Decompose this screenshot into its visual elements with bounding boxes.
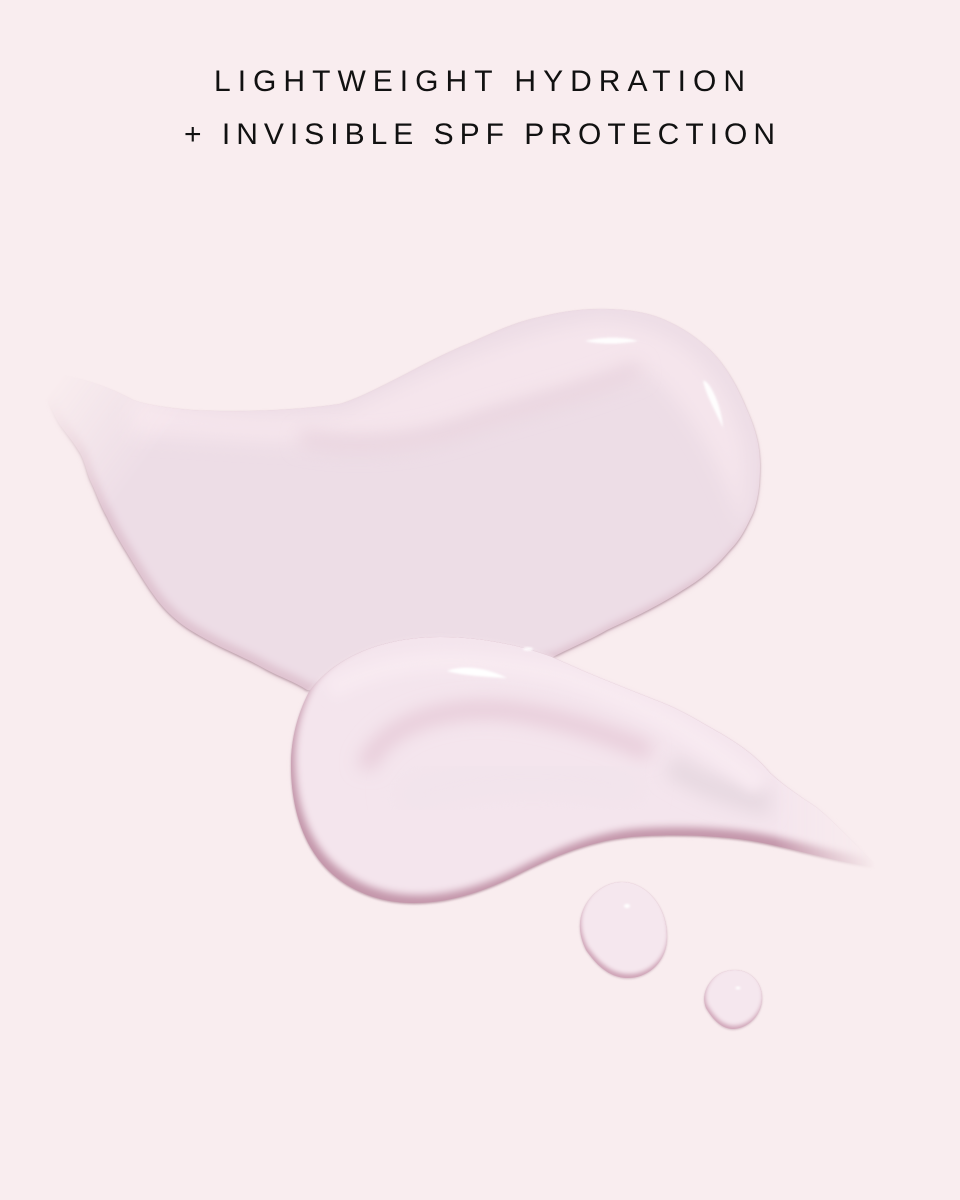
highlight: right gloss: [703, 381, 723, 428]
highlight: lower gloss: [447, 668, 507, 678]
infographic canvas: [54, 70, 866, 1031]
upper cream swatch: [40, 303, 764, 703]
highlight: small gloss at junction: [523, 647, 533, 651]
highlight: upper gloss: [585, 338, 638, 344]
title: + INVISIBLE SPF PROTECTION: [184, 118, 775, 151]
large droplet: [580, 878, 668, 979]
title: [184, 65, 775, 151]
lower cream swatch: [291, 629, 884, 904]
title: LIGHTWEIGHT HYDRATION: [214, 65, 745, 98]
small droplet: [704, 967, 763, 1030]
